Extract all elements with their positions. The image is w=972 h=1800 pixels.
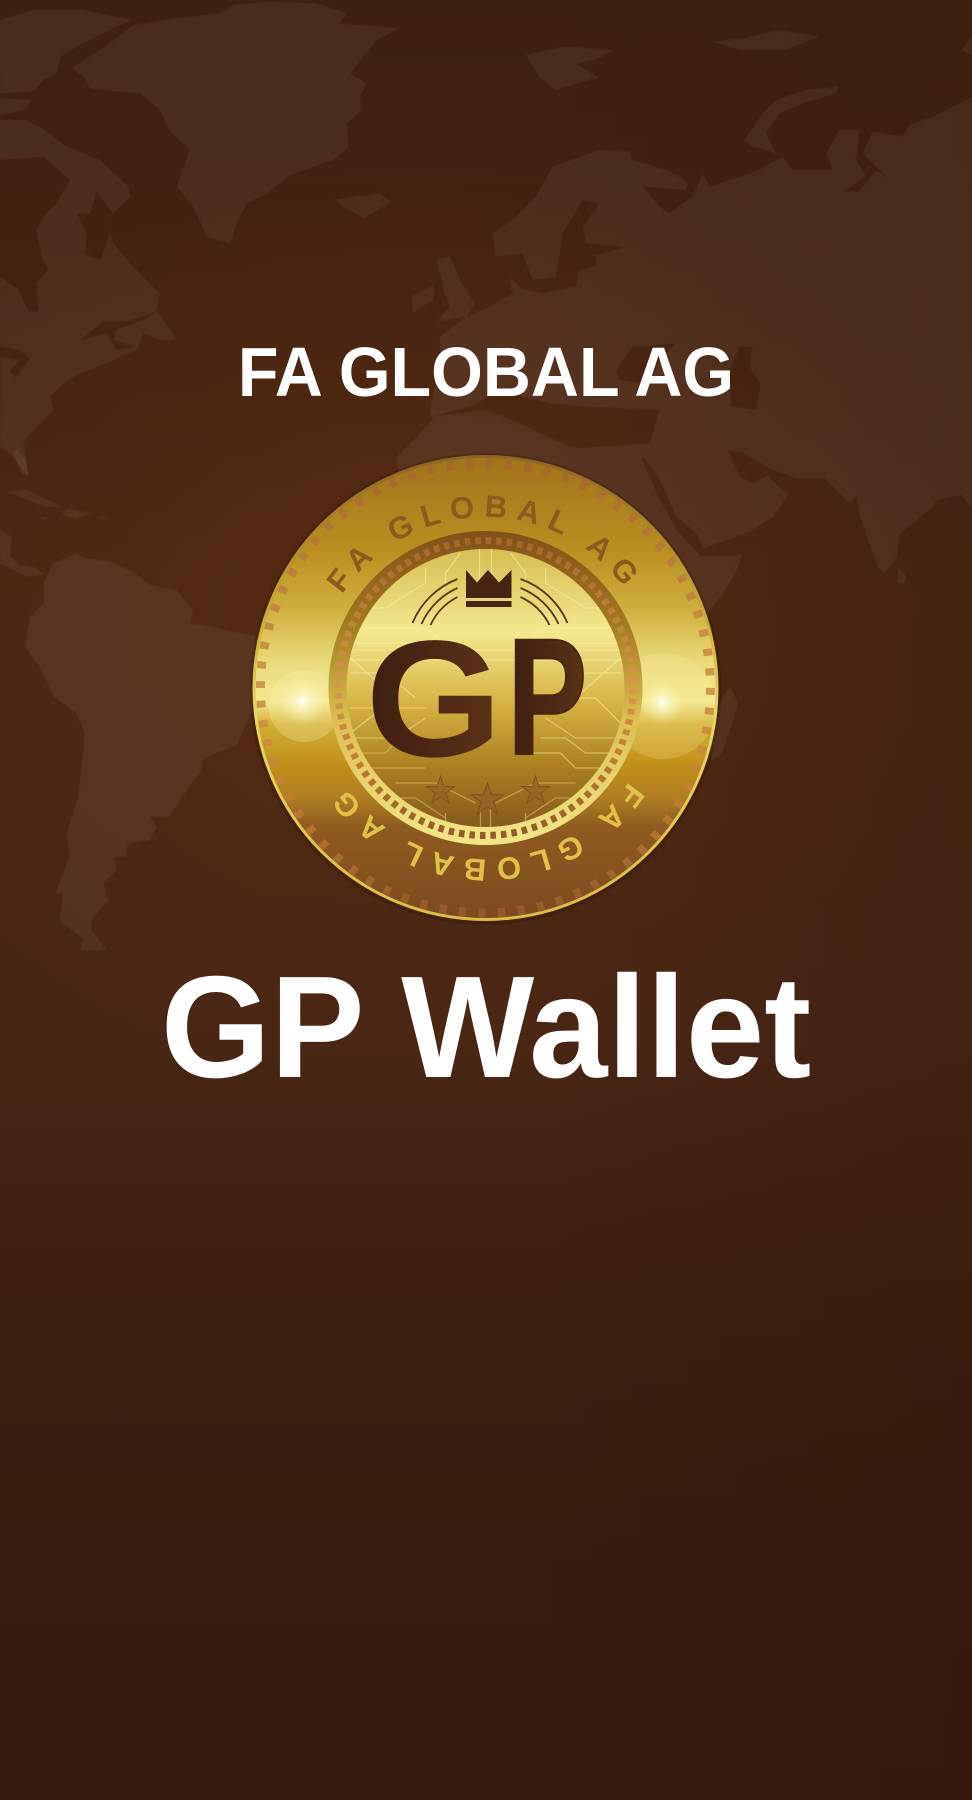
circuit traces [350, 549, 620, 827]
map: Madagascar [710, 687, 738, 760]
coin top lettering: FA GLOBAL AG [326, 495, 636, 592]
coin monogram GP [366, 604, 587, 792]
map: Eurasia and Africa [397, 97, 972, 733]
gold coin logo [250, 453, 722, 925]
map: Florida, Caribbean and Central America [0, 450, 108, 577]
coin highlights [268, 653, 716, 759]
coin outer body [250, 453, 722, 925]
map: Sri Lanka [897, 567, 907, 585]
coin monogram GP: P [508, 604, 587, 790]
map: Greenland [72, 2, 398, 243]
coin bottom lettering: FA GLOBAL AG [335, 784, 645, 881]
map: Svalbard and Arctic islands [526, 30, 972, 90]
map: North America [0, 120, 177, 477]
map: British Isles [412, 257, 475, 322]
crown [466, 570, 512, 607]
coin inner ring [328, 531, 642, 845]
coin monogram GP: G [366, 607, 502, 792]
map: Canadian Arctic [0, 10, 132, 115]
map: Iceland [335, 193, 392, 218]
crown arcs [412, 579, 568, 625]
map: South America [25, 553, 270, 950]
heading: GP Wallet: GP Wallet [161, 945, 811, 1108]
stars [426, 776, 550, 814]
world map background [0, 2, 972, 950]
title: FA GLOBAL AG: FA GLOBAL AG [238, 335, 734, 412]
coin rim ticks [260, 463, 710, 913]
map: Novaya Zemlya [744, 87, 838, 153]
coin centre disc [346, 549, 624, 827]
